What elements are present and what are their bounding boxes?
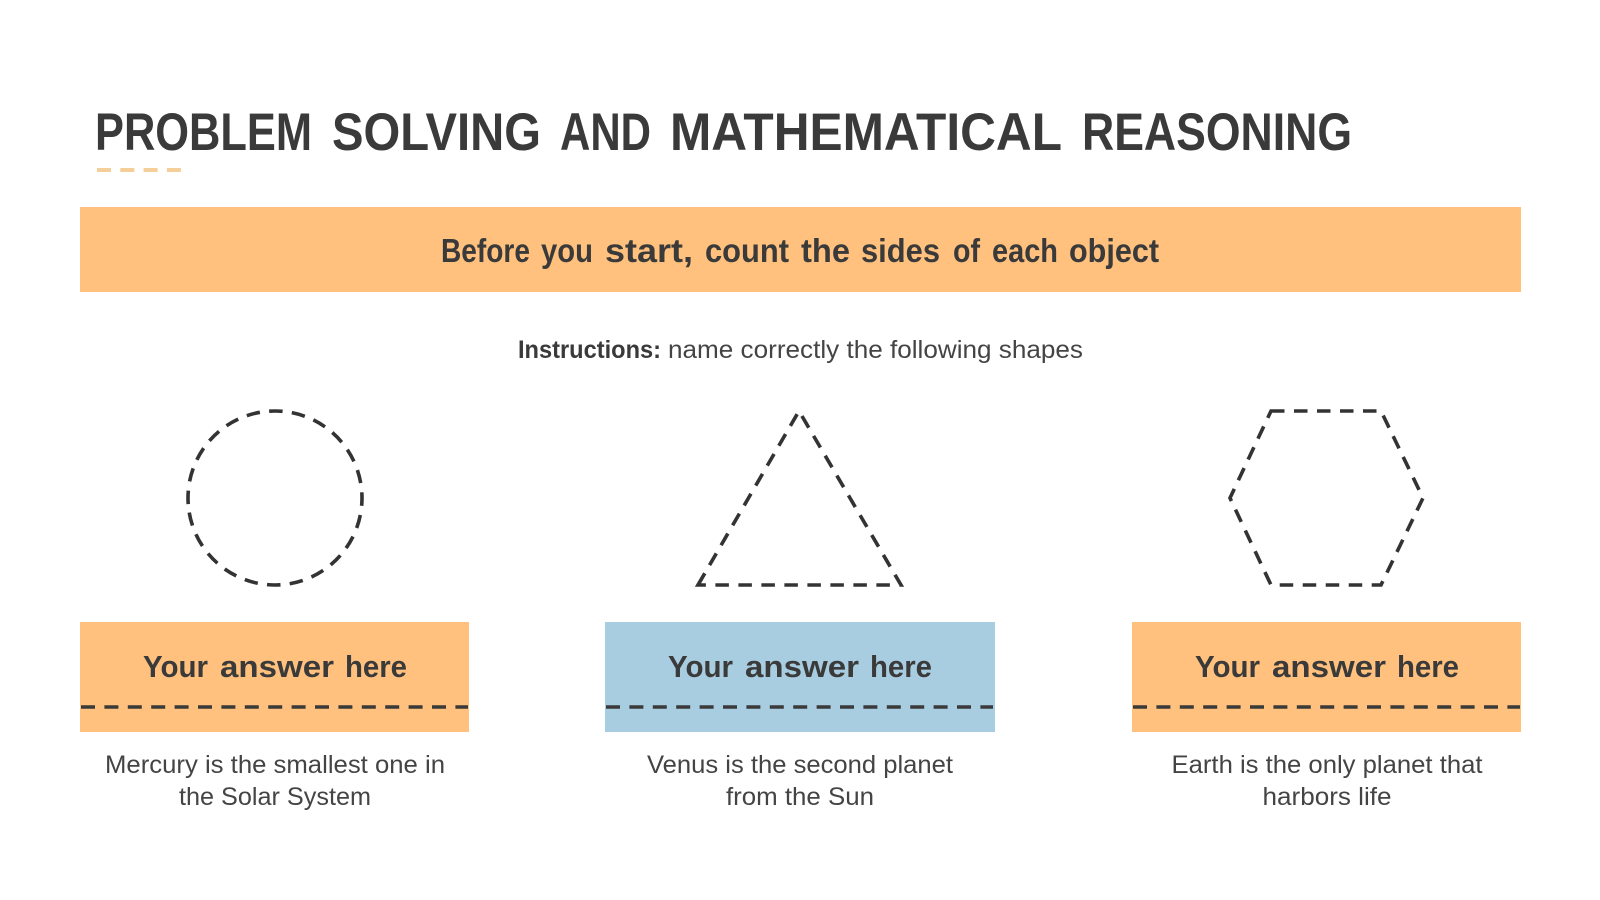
description: Venus [647, 751, 953, 811]
banner text: count [705, 232, 789, 269]
answer label 1: Your [143, 649, 208, 684]
banner text: the [801, 232, 850, 269]
description: Mercury [105, 751, 445, 811]
banner text: Before [441, 232, 530, 269]
banner text [441, 232, 1159, 269]
answer label 1: answer [220, 649, 334, 684]
title accent dashes [97, 168, 181, 172]
title: AND [560, 103, 651, 162]
answer label 2: Your [668, 649, 733, 684]
description: Earth: harbors life [1262, 783, 1392, 811]
panel: answer 3 [1132, 622, 1521, 732]
description: Venus: Venus is the second planet [647, 751, 953, 779]
title [95, 103, 1352, 162]
title: REASONING [1082, 103, 1352, 162]
banner text: you [541, 232, 593, 269]
answer label 2 [668, 649, 932, 684]
icon: dashed circle [182, 405, 368, 591]
answer label 3: Your [1195, 649, 1260, 684]
title: SOLVING [332, 103, 541, 162]
instructions: Instructions: [518, 336, 661, 364]
answer label 3 [1195, 649, 1459, 684]
banner text: start, [605, 232, 693, 269]
answer label 2: answer [745, 649, 859, 684]
description: Earth [1172, 751, 1483, 811]
description: Venus: from the Sun [726, 783, 874, 811]
icon: dashed triangle [698, 411, 901, 585]
panel: answer 1 [80, 622, 469, 732]
banner text: each [992, 232, 1058, 269]
answer label 2: here [870, 649, 932, 684]
banner text: sides [861, 232, 940, 269]
description: Mercury: Mercury is the smallest one in [105, 751, 445, 779]
answer label 1: here [345, 649, 407, 684]
description: Mercury: the Solar System [179, 783, 371, 811]
banner text: of [953, 232, 981, 269]
description: Earth: Earth is the only planet that [1172, 751, 1483, 779]
answer label 3: answer [1272, 649, 1386, 684]
banner [80, 207, 1521, 292]
title: MATHEMATICAL [670, 103, 1062, 162]
answer label 1 [143, 649, 407, 684]
title: PROBLEM [95, 103, 312, 162]
answer label 3: here [1397, 649, 1459, 684]
icon: dashed hexagon [1230, 411, 1423, 585]
panel: answer 2 [605, 622, 995, 732]
banner text: object [1069, 232, 1159, 269]
instructions: name correctly the following shapes [668, 336, 1083, 364]
